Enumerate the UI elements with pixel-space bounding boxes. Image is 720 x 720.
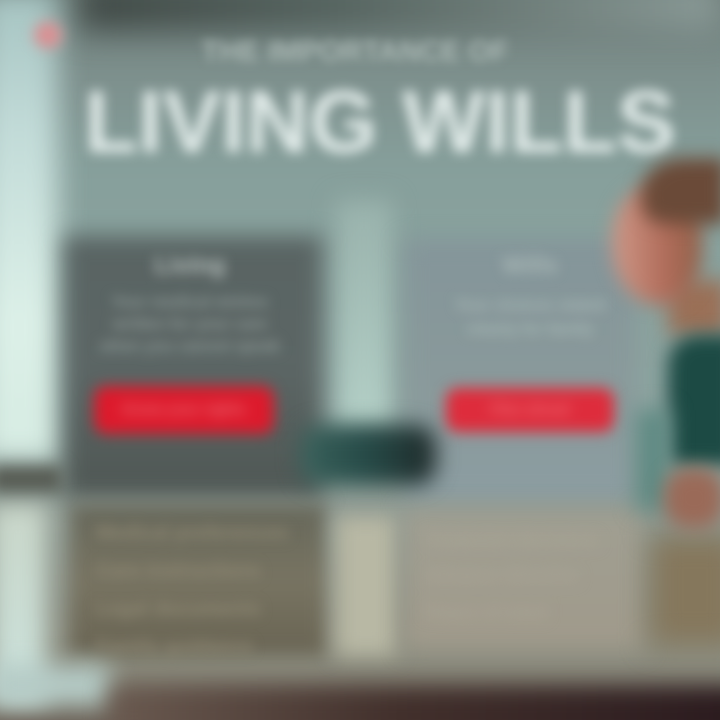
dark top band	[80, 0, 720, 30]
lower table left	[70, 504, 326, 656]
right panel body: clearly for family	[466, 321, 594, 338]
left panel body	[100, 294, 280, 355]
person arm	[664, 468, 720, 528]
lower table right rows: Treatment decisions	[425, 530, 599, 550]
lower table right rows: Peace of mind	[425, 602, 547, 622]
lower table right rows	[425, 522, 635, 642]
left panel heading: Living	[155, 252, 225, 279]
lower left light	[0, 504, 46, 704]
lower table left rows: Medical preferences	[96, 522, 288, 544]
bottom right warm	[650, 535, 720, 645]
right lighter panel	[404, 240, 636, 500]
right panel heading: Wills	[502, 252, 558, 279]
red button right	[446, 388, 614, 432]
dark green object centre	[300, 425, 436, 485]
person neck	[668, 280, 720, 335]
lower table left rows	[96, 522, 288, 658]
bottom light strip	[0, 665, 110, 705]
person	[602, 146, 720, 534]
red button left	[94, 386, 274, 434]
heading: living wills: LIVING WILLS	[84, 72, 676, 171]
left light column	[0, 0, 58, 460]
red button left: Know your rights	[122, 401, 246, 418]
right panel body	[455, 297, 605, 338]
person face	[612, 186, 702, 304]
lower table right	[404, 510, 644, 650]
left panel body: written for your care	[113, 316, 267, 333]
lower table left rows: Care instructions	[96, 560, 260, 582]
right panel body: Your choices stated	[455, 297, 605, 314]
lower table right rows: Advance directive	[425, 566, 579, 586]
heading line: the importance of: THE IMPORTANCE OF	[201, 36, 509, 68]
center light column	[336, 200, 392, 430]
left panel body: when you cannot speak	[100, 338, 280, 355]
lower table left rows: Legal documents	[96, 598, 260, 620]
red icon top left	[34, 22, 62, 48]
person sleeve light edge	[636, 410, 670, 510]
lower center strip	[336, 516, 396, 656]
left dark panel	[64, 236, 322, 498]
person hair	[642, 158, 720, 224]
lower table left rows: Family guidance	[96, 636, 253, 658]
left panel text	[100, 252, 280, 355]
red button right: Plan ahead	[490, 401, 570, 418]
horizontal shelf	[0, 466, 62, 492]
left panel body: Your medical wishes	[111, 294, 269, 311]
bottom dark band	[110, 686, 720, 720]
right panel text	[455, 252, 605, 338]
person shirt	[668, 335, 720, 465]
heading block	[82, 36, 680, 171]
